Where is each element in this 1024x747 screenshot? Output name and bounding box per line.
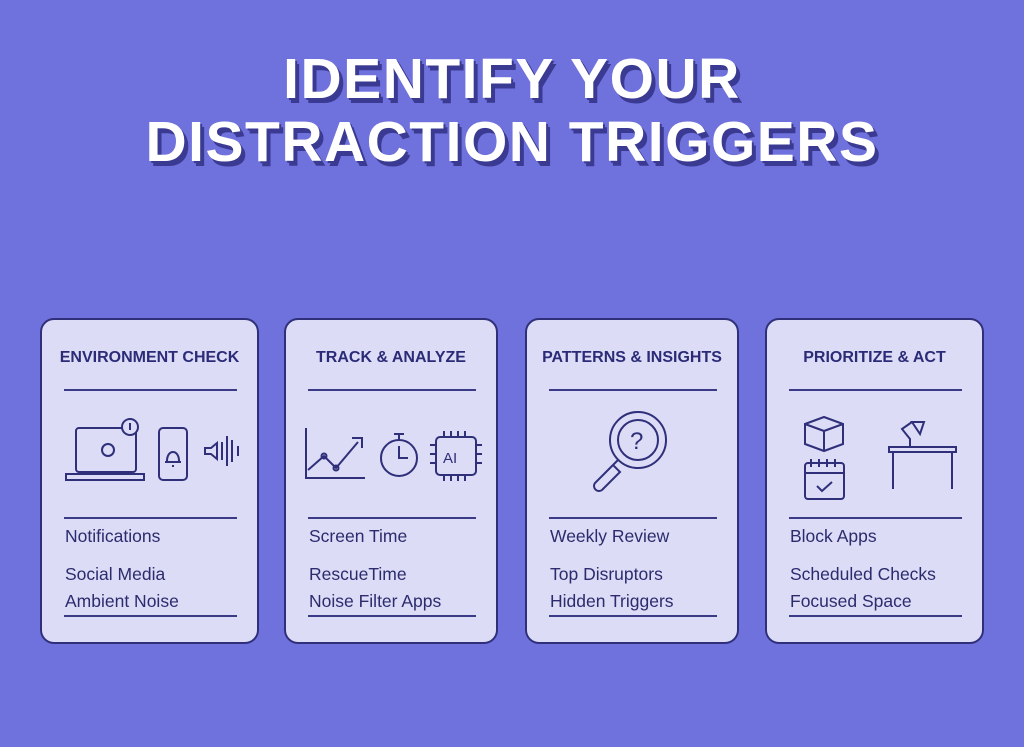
- panel: prioritize & act: Focused Space: [790, 591, 912, 611]
- panel: patterns & insights: Top Disruptors: [550, 564, 663, 584]
- panel: prioritize & act: Scheduled Checks: [790, 564, 936, 584]
- heading: track: TRACK & ANALYZE: [316, 349, 466, 366]
- title: [145, 47, 879, 174]
- panel: environment check: Ambient Noise: [65, 591, 179, 611]
- panel: track & analyze: [284, 318, 498, 644]
- panel: patterns & insights: [525, 318, 739, 644]
- panel: environment check: [40, 318, 259, 644]
- title: DISTRACTION TRIGGERS: [145, 110, 878, 174]
- icons: chart, stopwatch, AI chip: AI: [443, 450, 457, 467]
- panel: prioritize & act: [765, 318, 984, 644]
- list: Weekly Review: [550, 526, 669, 546]
- icon: magnifier: [593, 411, 667, 492]
- icons: box, calendar, desk lamp: [804, 416, 957, 500]
- panel: track & analyze: Noise Filter Apps: [309, 591, 441, 611]
- list: Notifications: [65, 526, 160, 546]
- panel: environment check: Social Media: [65, 564, 165, 584]
- title: IDENTIFY YOUR: [283, 47, 741, 111]
- list: Screen Time: [309, 526, 407, 546]
- heading: patterns: PATTERNS & INSIGHTS: [542, 349, 722, 366]
- panel: patterns & insights: Hidden Triggers: [550, 591, 674, 611]
- icons: laptop, phone, sound: [65, 418, 239, 481]
- icons: chart, stopwatch, AI chip: [305, 428, 482, 481]
- panel: track & analyze: RescueTime: [309, 564, 407, 584]
- heading: environment check: ENVIRONMENT CHECK: [60, 349, 239, 366]
- heading: prioritize: PRIORITIZE & ACT: [803, 349, 946, 366]
- icon: magnifier: ?: [630, 428, 643, 455]
- list: Block Apps: [790, 526, 877, 546]
